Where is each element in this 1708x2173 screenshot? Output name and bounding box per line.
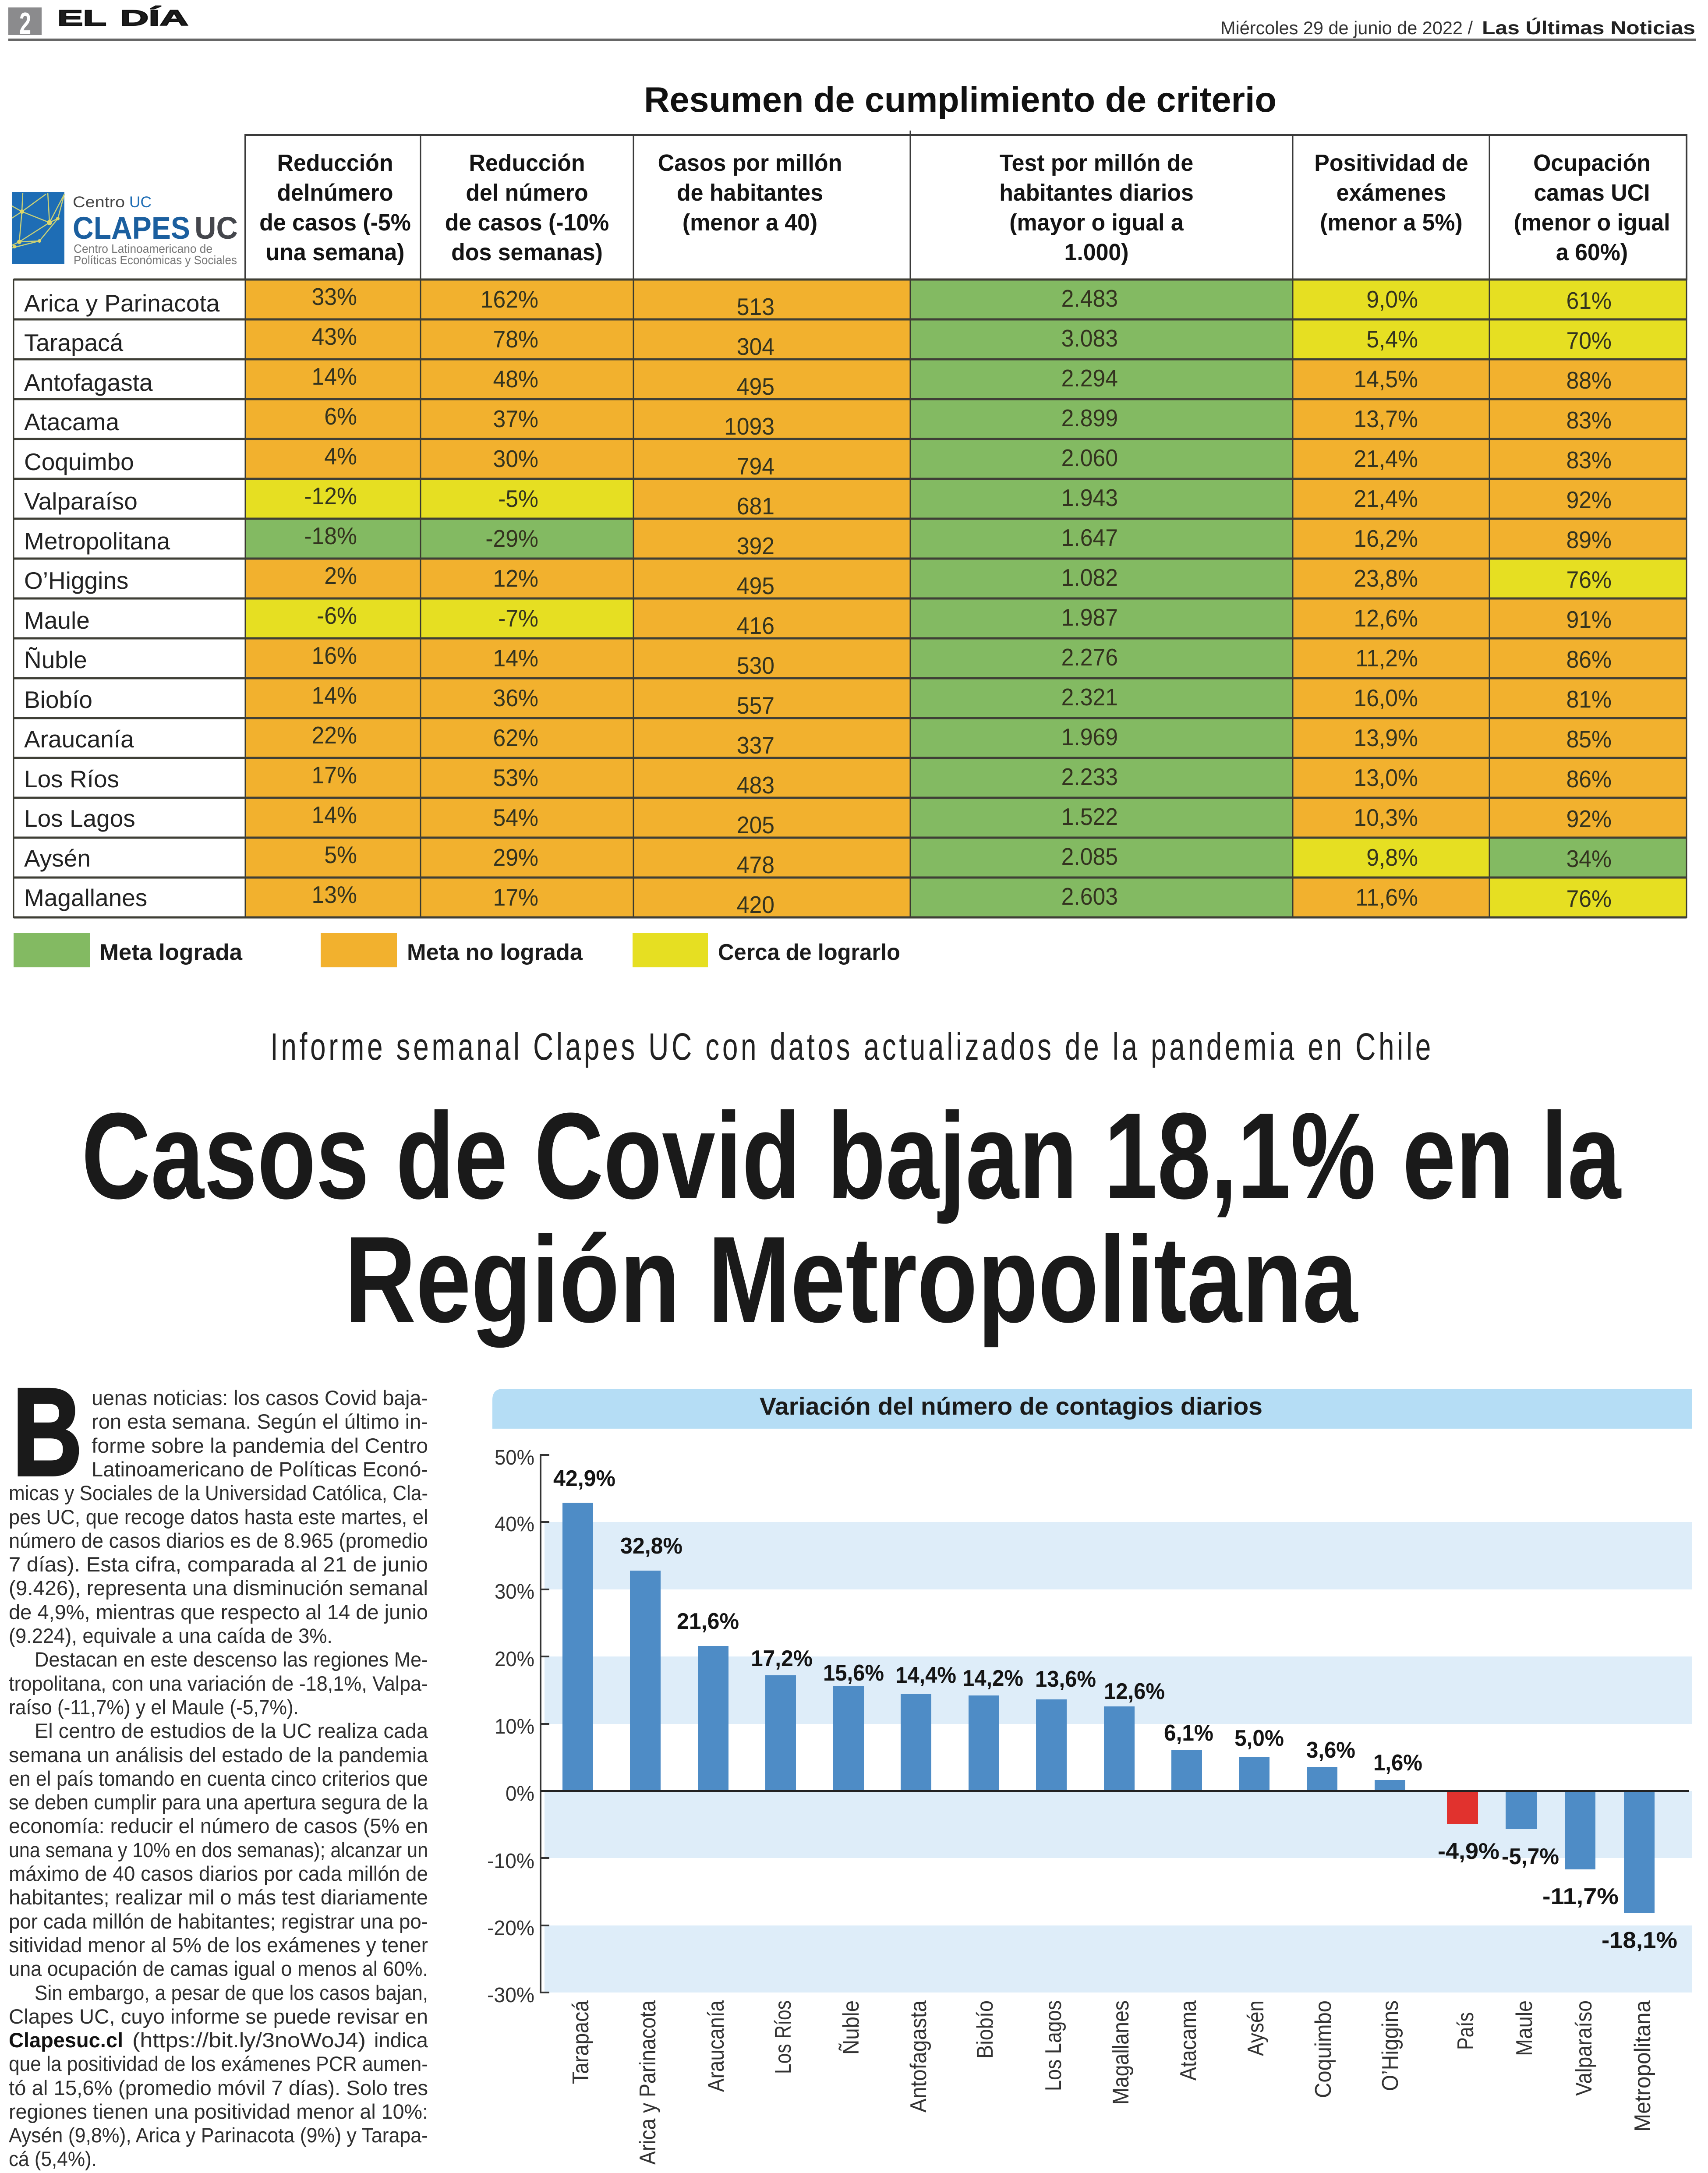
row: Antofagasta: 88% [1567,368,1612,394]
value labels: 42,9% [553,1466,615,1491]
article body text: sitividad menor al 5% de los exámenes y tener [9,1933,428,1957]
article body text: que la positividad de los exámenes PCR aumen- [9,2052,428,2075]
chart title banner: Variación del número de contagios diarios [760,1392,1262,1420]
value labels: -4,9% [1438,1839,1499,1864]
header: col 3: Casos por millón [658,150,842,176]
logo: Clapes UC [12,192,238,267]
row: Valparaíso: 681 [737,493,774,520]
row: Metropolitana: 392 [737,533,774,559]
y axis: -30% [487,1984,534,2007]
header: col 4: (mayor o igual a [1009,209,1184,236]
y axis: 50% [495,1446,534,1469]
legend: cerca de lograrlo [633,933,900,967]
row: Maule: Maule [24,607,90,634]
row: Magallanes [14,878,1687,918]
article body text: (9.426), representa una disminución semanal [9,1576,428,1600]
article body text: de 4,9%, mientras que respecto al 14 de junio [9,1600,428,1624]
value labels: 13,6% [1035,1667,1096,1692]
region axis labels: Valparaíso [1571,2000,1597,2096]
date and newspaper name: Las Últimas Noticias [1482,17,1695,39]
row: Atacama: 1093 [724,414,774,440]
row: Los Ríos: 86% [1567,766,1612,793]
row: Biobío: 81% [1567,687,1612,713]
row: Los Ríos [14,758,1687,799]
row: Coquimbo: 794 [737,453,774,480]
headline [81,1088,1621,1348]
row: Tarapacá: Tarapacá [24,329,124,356]
row: Los Ríos: 2.233 [1061,764,1118,790]
article body text: se deben cumplir para una apertura segura de la [9,1791,428,1814]
row: O'Higgins [14,559,1687,599]
article body text [9,1363,428,2170]
region axis labels: Coquimbo [1311,2000,1336,2098]
row: Maule [14,598,1687,639]
header: col 6: a 60%) [1556,239,1628,265]
y axis [487,1446,549,2007]
region axis labels: Metropolitana [1630,2000,1655,2132]
region axis labels: Magallanes [1108,2000,1134,2105]
logo text: Centro Latinoamericano de [74,242,212,255]
y axis: 20% [495,1648,534,1671]
region axis labels: Ñuble [838,2000,864,2055]
value labels: -5,7% [1502,1844,1559,1869]
row: Biobío: 2.321 [1061,684,1118,711]
row: Coquimbo [14,439,1687,480]
row: Ñuble: 11,2% [1355,645,1418,672]
row: Atacama: 37% [493,406,538,432]
date and newspaper name [1220,17,1695,39]
region axis labels: Maule [1512,2000,1537,2056]
header: col 6: (menor o igual [1514,209,1670,236]
article body text: (9.224), equivale a una caída de 3%. [9,1624,332,1647]
row: Atacama: 13,7% [1354,406,1418,432]
row: Valparaíso: -12% [304,483,357,510]
row: O'Higgins: O’Higgins [24,567,128,594]
row: Maule: -6% [317,603,357,629]
region axis labels: País [1453,2012,1478,2050]
page header strip [8,6,1696,41]
row: Atacama: 83% [1567,407,1612,434]
article body text: economía: reducir el número de casos (5% en [9,1814,428,1837]
article body text: ron esta semana. Según el último in- [92,1410,428,1433]
row: Metropolitana [14,519,1687,559]
legend: meta lograda [14,933,243,967]
row: Los Ríos: 17% [312,762,357,789]
row: Maule: 1.987 [1061,605,1118,631]
row: Antofagasta: Antofagasta [24,369,153,396]
row: Araucanía: 62% [493,725,538,751]
region axis labels: Biobío [972,2000,998,2059]
value labels: 17,2% [751,1646,813,1671]
article body text: indica [374,2028,428,2052]
row: Magallanes: 13% [312,882,357,908]
row: Los Lagos [14,798,1687,839]
header: col 2 [445,150,609,265]
article body text: cá (5,4%). [9,2147,97,2170]
drop cap: B [12,1363,82,1502]
article body text: pes UC, que recoge datos hasta este martes, el [9,1505,428,1529]
article body text: 7 días). Esta cifra, comparada al 21 de junio [9,1553,428,1576]
region axis labels: Araucanía [704,2000,729,2092]
region axis labels: Aysén [1243,2000,1269,2056]
row: Magallanes: 17% [493,885,538,911]
header: col 6: camas UCI [1534,180,1650,206]
row: Coquimbo: 30% [493,446,538,472]
row: Los Ríos: Los Ríos [24,765,119,793]
row: Araucanía: 85% [1567,726,1612,753]
legend: meta no lograda: Meta no lograda [407,940,583,965]
header: col 2: del número [466,180,588,206]
row: Tarapacá: 3.083 [1061,326,1118,352]
row: Antofagasta: 14% [312,364,357,390]
region axis labels: Antofagasta [906,2000,931,2113]
value labels: 5,0% [1234,1726,1284,1751]
row: Coquimbo: 21,4% [1354,446,1418,472]
row: Antofagasta: 495 [737,374,774,400]
legend [14,933,900,967]
article body text: Clapesuc.cl [9,2028,123,2052]
section name: DÍA [120,6,188,30]
region axis labels: Los Ríos [771,2000,796,2074]
row: Maule: 91% [1567,607,1612,633]
region axis labels: Tarapacá [568,2000,594,2084]
row: Coquimbo: 83% [1567,447,1612,474]
chart title banner [492,1389,1692,1429]
region axis labels [568,2000,1655,2165]
header: col 1 [259,150,411,265]
region axis labels: Los Lagos [1041,2000,1066,2091]
article body text: Sin embargo, a pesar de que los casos bajan, [35,1981,428,2004]
row: Los Lagos: Los Lagos [24,805,135,832]
row: Metropolitana: -18% [304,523,357,549]
table title: Resumen de cumplimiento de criterio [644,80,1277,120]
row: Ñuble: 14% [493,645,538,672]
row: Metropolitana: Metropolitana [24,527,170,555]
header: col 4: 1.000) [1064,239,1128,265]
article body text: por cada millón de habitantes; registrar una po- [9,1910,428,1933]
value labels: 12,6% [1104,1679,1165,1704]
logo text [73,194,238,267]
row: Valparaíso: 1.943 [1061,485,1118,511]
row: Biobío: 14% [312,683,357,709]
region axis labels: O’Higgins [1378,2000,1403,2091]
row: Aysén: 2.085 [1061,844,1118,870]
region axis labels: Arica y Parinacota [635,2000,661,2165]
row: O'Higgins: 23,8% [1354,566,1418,592]
article body text: El centro de estudios de la UC realiza cada [35,1719,428,1742]
header: col 1: una semana) [266,239,404,265]
logo text: UC [129,194,152,211]
article body text: semana un análisis del estado de la pandemia [9,1743,428,1766]
icon: network square [12,192,64,264]
row: Magallanes: 2.603 [1061,884,1118,910]
row: Antofagasta: 14,5% [1354,366,1418,393]
row: Valparaíso: 21,4% [1354,486,1418,512]
row: Maule: 416 [737,613,774,639]
page number: 2 [19,6,31,40]
row: Tarapacá: 43% [312,324,357,350]
row: Los Ríos: 53% [493,765,538,791]
row: Maule: -7% [498,605,538,632]
bar chart: variation in daily cases [487,1389,1692,2165]
header: col 1: Reducción [277,150,393,176]
row: Los Lagos: 54% [493,805,538,831]
row: Los Lagos: 14% [312,802,357,828]
row: Coquimbo: 2.060 [1061,445,1118,471]
article body text: Aysén (9,8%), Arica y Parinacota (9%) y Tarapa- [9,2123,428,2147]
row: Aysén [14,838,1687,878]
article body text: habitantes; realizar mil o más test diariamente [9,1886,428,1909]
row: Aysén: 9,8% [1366,845,1418,871]
logo text: Políticas Económicas y Sociales [74,253,237,267]
header: col 2: dos semanas) [451,239,603,265]
y axis: 10% [495,1715,534,1738]
bars [562,1503,1655,1913]
row: Antofagasta: 48% [493,366,538,393]
row: Maule: 12,6% [1354,605,1418,632]
row: Araucanía: 337 [737,733,774,759]
header: col 3 [658,150,842,236]
row: Ñuble: Ñuble [24,646,87,673]
row: Ñuble: 530 [737,653,774,679]
header: col 4: habitantes diarios [999,180,1194,206]
legend: cerca de lograrlo: Cerca de lograrlo [718,940,900,965]
header: col 3: de habitantes [677,180,823,206]
row: Los Lagos: 1.522 [1061,804,1118,830]
row: Biobío: Biobío [24,686,92,713]
row: Valparaíso: -5% [498,486,538,512]
row: Aysén: 34% [1567,846,1612,872]
row: Aysén: 478 [737,852,774,878]
logo text: UC [194,211,238,246]
table: criteria by region [14,131,1687,918]
y axis: -10% [487,1850,534,1873]
header: col 1: delnúmero [277,180,393,206]
row: Araucanía: 13,9% [1354,725,1418,751]
article body text: micas y Sociales de la Universidad Católica, Cla- [9,1481,428,1504]
row: Atacama: Atacama [24,408,119,435]
row: Coquimbo: 4% [324,443,357,470]
row: Ñuble: 16% [312,643,357,669]
article body text: regiones tienen una positividad menor al 10%: [9,2100,428,2123]
row: Metropolitana: -29% [485,526,538,552]
y axis: 40% [495,1513,534,1536]
header: col 1: de casos (-5% [259,209,411,236]
article body text: máximo de 40 casos diarios por cada millón de [9,1862,428,1885]
row: Araucanía [14,718,1687,759]
page number [8,6,42,40]
value labels: 32,8% [620,1533,682,1559]
row: Ñuble: 2.276 [1061,644,1118,671]
value labels: 14,2% [962,1666,1023,1691]
section name: EL [57,6,106,30]
row: Tarapacá: 304 [737,334,774,360]
row: Arica y Parinacota [14,280,1687,320]
row: Arica y Parinacota: Arica y Parinacota [24,290,220,317]
value labels: 3,6% [1306,1738,1355,1763]
row: Arica y Parinacota: 162% [481,287,538,313]
value labels [553,1466,1677,1953]
row: Atacama: 6% [324,403,357,430]
table header [245,131,1687,280]
row: Los Lagos: 205 [737,812,774,839]
row: Antofagasta: 2.294 [1061,365,1118,392]
row: Atacama [14,399,1687,440]
header: col 6: Ocupación [1533,150,1651,176]
row: Los Ríos: 483 [737,772,774,799]
row: Metropolitana: 89% [1567,527,1612,553]
logo text: CLAPES [73,211,190,246]
article body text: Latinoamericano de Políticas Econó- [92,1458,428,1481]
headline: Región Metropolitana [344,1211,1358,1348]
article body text: Clapes UC, cuyo informe se puede revisar en [9,2005,428,2028]
value labels: 6,1% [1164,1720,1213,1746]
row: Tarapacá: 70% [1567,328,1612,354]
row: Los Lagos: 92% [1567,806,1612,832]
article body text: uenas noticias: los casos Covid baja- [92,1386,428,1409]
row: Tarapacá [14,319,1687,360]
header: col 5: Positividad de [1314,150,1468,176]
article body text: una semana y 10% en dos semanas); alcanzar un [9,1838,428,1862]
value labels: 15,6% [823,1660,884,1686]
row: Valparaíso [14,479,1687,520]
row: Arica y Parinacota: 513 [737,294,774,320]
row: Los Lagos: 10,3% [1354,805,1418,831]
row: Biobío: 16,0% [1354,685,1418,711]
header: col 2: Reducción [469,150,585,176]
row: O'Higgins: 76% [1567,567,1612,593]
row: Los Ríos: 13,0% [1354,765,1418,791]
row: Valparaíso: 92% [1567,487,1612,513]
row: Metropolitana: 1.647 [1061,525,1118,551]
legend: meta no lograda [321,933,583,967]
row: Arica y Parinacota: 2.483 [1061,286,1118,312]
row: O'Higgins: 495 [737,573,774,599]
row: Ñuble [14,638,1687,679]
row: Araucanía: Araucanía [24,726,134,753]
row: Tarapacá: 5,4% [1366,326,1418,353]
row: Tarapacá: 78% [493,326,538,353]
row: Biobío: 36% [493,685,538,711]
article body text: en el país tomando en cuenta cinco criterios que [9,1767,428,1790]
header: col 4: Test por millón de [1000,150,1193,176]
article body text: (https://bit.ly/3noWoJ4) [132,2028,366,2052]
row: Ñuble: 86% [1567,647,1612,673]
row: Atacama: 2.899 [1061,405,1118,432]
header: col 5: exámenes [1337,180,1446,206]
article body text: raíso (-11,7%) y el Maule (-5,7%). [9,1695,299,1719]
row: Magallanes: 11,6% [1355,885,1418,911]
row: Araucanía: 22% [312,722,357,749]
row: Aysén: 5% [324,842,357,868]
row: Magallanes: 420 [737,892,774,918]
region axis labels: Atacama [1176,2000,1201,2081]
header: col 5: (menor a 5%) [1320,209,1463,236]
row: Arica y Parinacota: 9,0% [1366,287,1418,313]
legend: meta lograda: Meta lograda [99,940,243,965]
y axis: 30% [495,1580,534,1603]
value labels: 14,4% [895,1663,956,1688]
row: Magallanes: 76% [1567,886,1612,912]
row: Magallanes: Magallanes [24,884,147,911]
article body text: tropolitana, con una variación de -18,1%, Valpa- [9,1672,428,1695]
value labels: 21,6% [677,1609,739,1634]
article body text: Destacan en este descenso las regiones Me- [35,1648,428,1671]
article body text: una ocupación de camas igual o menos al 60%. [9,1957,428,1980]
y axis: -20% [487,1917,534,1940]
header: col 5 [1314,150,1468,236]
row: Aysén: Aysén [24,845,91,872]
row: O'Higgins: 12% [493,566,538,592]
header: col 6 [1514,150,1670,265]
row: Biobío [14,678,1687,719]
row: Aysén: 29% [493,845,538,871]
value labels: -11,7% [1542,1884,1619,1909]
row: Arica y Parinacota: 61% [1567,288,1612,314]
value labels: -18,1% [1602,1928,1677,1953]
article body text: número de casos diarios es de 8.965 (promedio [9,1529,428,1552]
logo text: Centro [73,194,125,211]
row: O'Higgins: 2% [324,563,357,589]
article body text: tó al 15,6% (promedio móvil 7 días). Solo tres [9,2076,428,2099]
row: Valparaíso: Valparaíso [24,488,138,515]
header: col 3: (menor a 40) [682,209,817,236]
y axis: 0% [506,1782,534,1805]
row: Araucanía: 1.969 [1061,724,1118,750]
row: Metropolitana: 16,2% [1354,526,1418,552]
row: Biobío: 557 [737,693,774,719]
row: Antofagasta [14,359,1687,400]
row: O'Higgins: 1.082 [1061,565,1118,591]
article body text: forme sobre la pandemia del Centro [92,1434,428,1457]
row: Coquimbo: Coquimbo [24,448,134,475]
date and newspaper name: Miércoles 29 de junio de 2022 / [1220,18,1473,38]
value labels: 1,6% [1373,1750,1422,1776]
header: col 2: de casos (-10% [445,209,609,236]
row: Arica y Parinacota: 33% [312,284,357,310]
header: col 4 [999,150,1194,265]
section name [57,6,188,30]
